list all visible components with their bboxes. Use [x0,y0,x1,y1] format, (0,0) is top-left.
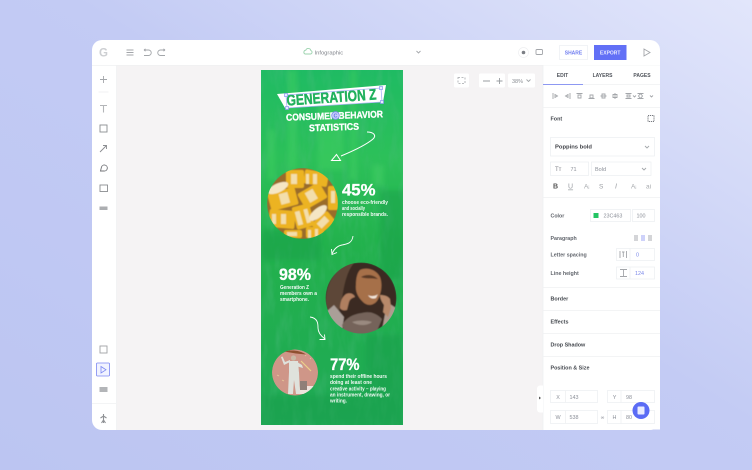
sun and comment icons [518,48,542,58]
tabs [543,73,660,84]
tabs: EDIT [557,73,568,79]
subtitle: CONSUMER BEHAVIOR [286,109,383,124]
canvas zoom controls: 38% [512,79,523,85]
photo: eco-friendly cups [266,168,338,239]
position and size fields: 143 [570,395,578,401]
export button: EXPORT [600,50,620,56]
arrow: to third stat [310,317,325,340]
selection handles [284,86,384,120]
font section: Aᵢ [584,184,589,190]
font section: Aᵢ [631,184,636,190]
style icons: B [553,184,558,190]
position and size fields: ∞ [601,415,605,421]
stat: 45%: choose eco-friendly [342,200,388,206]
color row: 23C463 [604,214,622,220]
letter spacing row [550,248,654,260]
letter spacing row: 0 [636,252,639,258]
font section: Poppins bold [555,144,592,150]
table tool [100,387,108,392]
panel collapse tab [537,386,543,412]
font section: S [599,184,604,190]
share button [560,46,588,60]
stat: 45% [342,184,388,217]
position and size fields: W [555,415,561,421]
stat: 77%: doing at least one [330,380,372,386]
color row [550,210,654,222]
tabs: LAYERS [593,73,613,79]
right properties panel [543,65,660,430]
stat: 45%: and socially [342,206,365,212]
font dropdown [550,138,654,156]
paragraph row: Paragraph [550,236,577,242]
stat: 98%: 98% [279,265,311,284]
font section: Bold [595,167,606,173]
position and size heading: Position & Size [550,365,589,371]
stat: 77%: spend their offline hours [330,374,387,380]
effects heading: Effects [550,320,568,326]
stat: 77%: creative activity – playing [330,386,386,392]
font section: 71 [570,167,577,173]
stat: 45%: responsible brands. [342,212,389,218]
font section: I [615,184,617,190]
photo: man with instrument [272,350,318,396]
letter spacing row: Letter spacing [550,252,587,258]
stat: 98% [279,268,317,302]
canvas zoom controls [454,74,535,88]
top bar [92,45,660,66]
canvas area [117,65,543,430]
selection handles: C [334,114,338,120]
infographic poster [261,70,405,425]
stat: 77%: 77% [330,355,360,374]
position and size fields [550,390,654,424]
export button [594,45,626,60]
font section [550,116,654,190]
font section: Font [550,116,562,122]
stat: 77% [329,355,390,405]
animation tool selected [96,363,110,376]
menu and undo icons [126,49,165,56]
position and size fields: H [613,415,617,421]
size field [550,162,588,176]
plus icon [100,76,107,83]
position and size fields: 98 [626,395,632,401]
stat: 45%: 45% [342,180,376,200]
stat: 77%: an instrument, drawing, or [330,392,390,398]
font section: ai [646,184,651,190]
share button: SHARE [565,50,583,56]
line height row: Line height [550,271,579,277]
position and size fields: X [556,395,560,401]
pen tool [100,165,107,171]
document title: Infographic [314,50,343,56]
photo: woman on phone [326,262,396,335]
font section: U [568,184,573,190]
alignment icons [553,93,653,99]
position and size fields: 538 [570,415,578,421]
left toolbar [92,65,116,430]
title banner: GENERATION Z [286,86,377,110]
color row: Color [550,214,564,220]
position and size fields: Y [613,395,617,401]
line height row: 124 [635,271,644,277]
arrow: to second stat [332,236,353,254]
stat: 77%: writing. [329,399,348,405]
stat: 98%: members own a [280,291,317,297]
arrow: to first stat [332,132,375,160]
paragraph row [550,236,652,242]
font section: Tт [555,167,562,173]
help figure icon [100,414,106,423]
border heading: Border [550,296,569,302]
color row: 100 [636,214,646,220]
tabs: PAGES [633,73,651,79]
image tool [100,185,108,192]
subtitle: STATISTICS [309,122,360,134]
position and size fields: 80 [626,415,632,421]
poster green background [261,70,403,425]
stat: 98%: smartphone. [280,297,310,303]
drop shadow heading: Drop Shadow [550,342,586,348]
embed tool [100,206,108,210]
arrow tool [100,146,106,152]
subtitle [286,110,384,132]
logo: G [99,48,108,60]
document title [304,48,420,56]
shape tool [100,125,107,132]
stat: 98%: Generation Z [280,285,309,291]
editor window [92,40,660,430]
line height row [550,267,654,279]
chat help button [632,402,650,419]
bottom tools [100,346,107,353]
play icon [644,49,650,56]
text tool [100,106,107,112]
weight dropdown [592,162,651,176]
